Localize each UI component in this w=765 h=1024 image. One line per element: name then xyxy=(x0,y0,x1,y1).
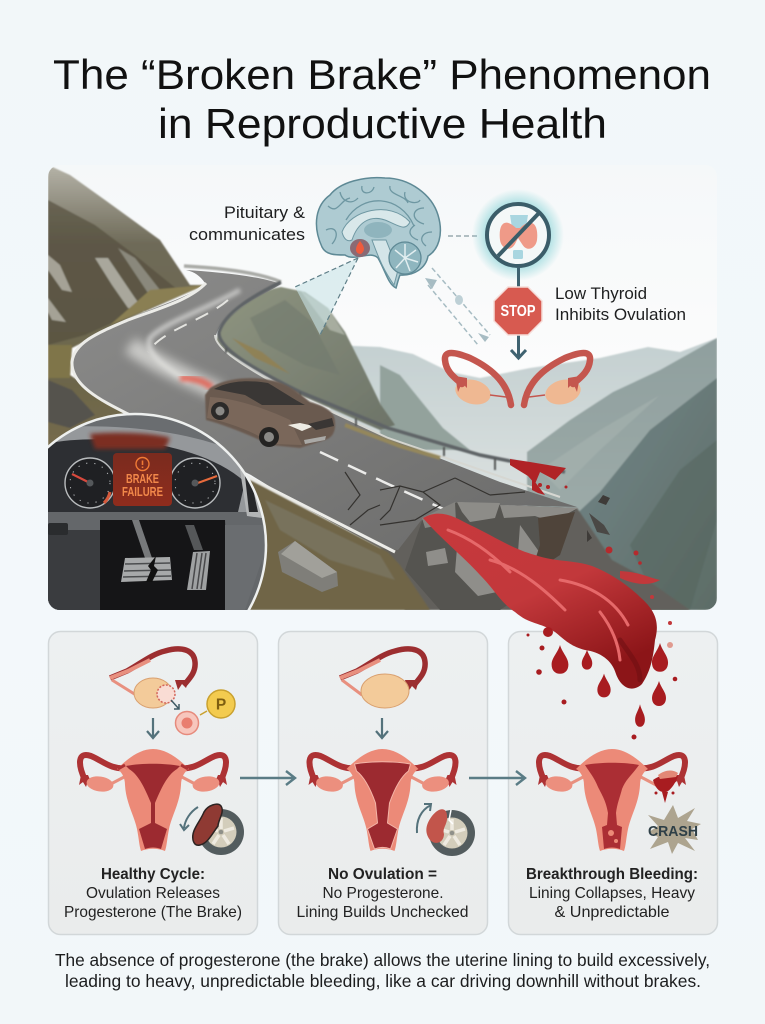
icon: thyroid with prohibition sign xyxy=(472,189,564,281)
inset: dashboard with brake failure warning: BRAKE xyxy=(126,472,159,486)
title: in Reproductive Health xyxy=(158,100,607,147)
icon: ovary releasing egg: P xyxy=(216,696,226,714)
text: no ovulation caption xyxy=(296,866,468,921)
panel: no ovulation xyxy=(278,632,488,934)
icon: brain xyxy=(316,178,440,288)
icon: ovary without release xyxy=(340,649,425,708)
blood at guardrail end xyxy=(510,459,568,495)
distant mountains xyxy=(330,338,717,610)
arrow: thyroid to stop sign to ovaries xyxy=(511,267,526,358)
label: pituitary: communicates xyxy=(189,225,305,244)
icon: thick lining uterus xyxy=(308,749,456,851)
title: The “Broken Brake” Phenomenon xyxy=(53,51,711,98)
icon: feedback dashed double arrows xyxy=(425,268,490,345)
text: no ovulation caption: Lining Builds Unchecked xyxy=(296,904,468,921)
bottom summary text: leading to heavy, unpredictable bleeding, like a car driving downhill without brakes. xyxy=(65,971,701,991)
bottom summary text xyxy=(55,950,710,991)
icon: projection cone from pituitary xyxy=(295,258,358,335)
icon: stop sign: STOP xyxy=(500,303,536,320)
left cliff and grass xyxy=(48,167,202,446)
text: bleeding caption: Lining Collapses, Heavy xyxy=(529,885,695,902)
text: healthy cycle caption: Ovulation Releases xyxy=(86,885,220,902)
cliff beneath the broken road xyxy=(380,508,690,610)
inset: dashboard with brake failure warning: FAILURE xyxy=(122,485,163,499)
dashed connector brain to thyroid xyxy=(448,235,480,237)
label: low thyroid xyxy=(555,284,686,324)
text: bleeding caption xyxy=(526,866,698,921)
blood flow spilling from road into third panel xyxy=(423,514,677,740)
icon: ovaries and fallopian tubes xyxy=(445,353,590,408)
icon: stop sign xyxy=(494,287,542,335)
panel: healthy cycle xyxy=(48,632,258,934)
speed gauges xyxy=(65,458,115,508)
arrow: down xyxy=(376,718,388,738)
air vent xyxy=(240,468,262,518)
icon: collapsing lining uterus xyxy=(538,749,686,851)
footwell xyxy=(48,512,262,610)
warning display xyxy=(113,453,172,506)
arrow: down xyxy=(147,718,159,738)
arrow: healthy to no ovulation xyxy=(240,771,295,785)
cracked road edge xyxy=(345,472,610,610)
text: healthy cycle caption: Progesterone (The Brake) xyxy=(64,904,242,921)
icon: crash burst xyxy=(648,805,701,854)
hillside behind the road xyxy=(215,287,395,430)
title xyxy=(53,51,711,147)
text: no ovulation caption: No Ovulation = xyxy=(328,866,437,883)
pedals xyxy=(132,520,152,558)
arrow: no ovulation to bleeding xyxy=(469,771,525,785)
label: pituitary: Pituitary & xyxy=(224,203,306,222)
blood drops xyxy=(552,645,568,674)
text: bleeding caption: Breakthrough Bleeding: xyxy=(526,866,698,883)
text: bleeding caption: & Unpredictable xyxy=(554,904,670,921)
bottom summary text: The absence of progesterone (the brake) allows the uterine lining to build excessively, xyxy=(55,950,710,970)
icon: crash burst: CRASH xyxy=(648,824,698,840)
sky xyxy=(72,344,698,377)
panel: mountain road hero scene xyxy=(48,167,717,610)
icon: bleeding ovary xyxy=(653,771,678,803)
motion blur xyxy=(130,345,220,392)
icon: brake on wheel xyxy=(180,804,244,855)
text: healthy cycle caption: Healthy Cycle: xyxy=(101,866,205,883)
label: low thyroid: Inhibits Ovulation xyxy=(555,305,686,324)
road xyxy=(71,270,577,552)
icon: healthy uterus xyxy=(79,749,227,851)
label: low thyroid: Low Thyroid xyxy=(555,284,647,303)
inset: dashboard with brake failure warning xyxy=(48,412,268,610)
guardrail xyxy=(184,266,565,472)
text: no ovulation caption: No Progesterone. xyxy=(322,885,444,902)
icon: ovary releasing egg xyxy=(110,649,235,734)
text: healthy cycle caption xyxy=(64,866,242,921)
label: pituitary xyxy=(189,203,306,244)
panel: breakthrough bleeding xyxy=(508,632,718,934)
car xyxy=(180,378,335,448)
icon: failed brake on wheel xyxy=(417,804,475,856)
grass below the road xyxy=(240,480,430,610)
